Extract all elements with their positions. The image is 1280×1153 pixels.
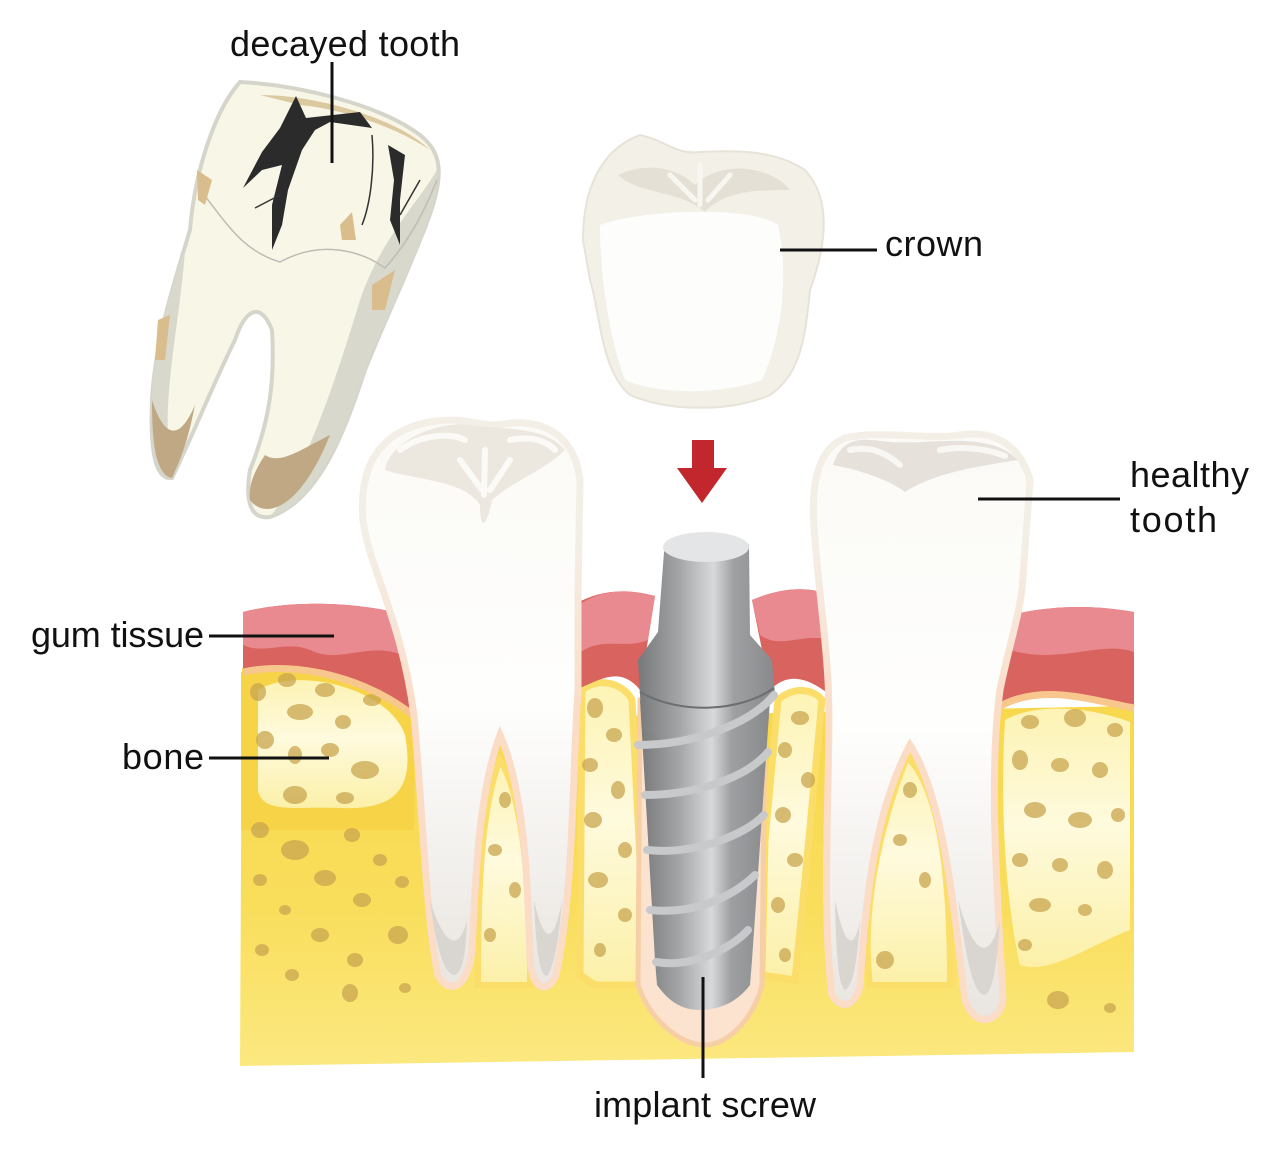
crown: [583, 135, 824, 408]
bone base: [240, 668, 1134, 1066]
label: healthy tooth: [978, 454, 1249, 540]
label: bone: bone: [122, 736, 204, 777]
label: crown: crown: [885, 223, 983, 264]
bone spongy texture: [250, 673, 1125, 1013]
implant screw: [638, 532, 775, 1010]
label: healthy tooth: healthy: [1130, 454, 1249, 495]
decayed tooth: [152, 82, 439, 517]
label: implant screw: implant screw: [594, 1084, 817, 1125]
gum tissue: [243, 589, 1134, 716]
label: decayed tooth: decayed tooth: [230, 23, 460, 64]
implant socket: [638, 700, 765, 1045]
left healthy tooth: [362, 420, 580, 987]
label: healthy tooth: tooth: [1130, 499, 1217, 540]
label: gum tissue: gum tissue: [31, 614, 204, 655]
arrow: [677, 440, 727, 503]
right healthy tooth: [813, 434, 1030, 1020]
